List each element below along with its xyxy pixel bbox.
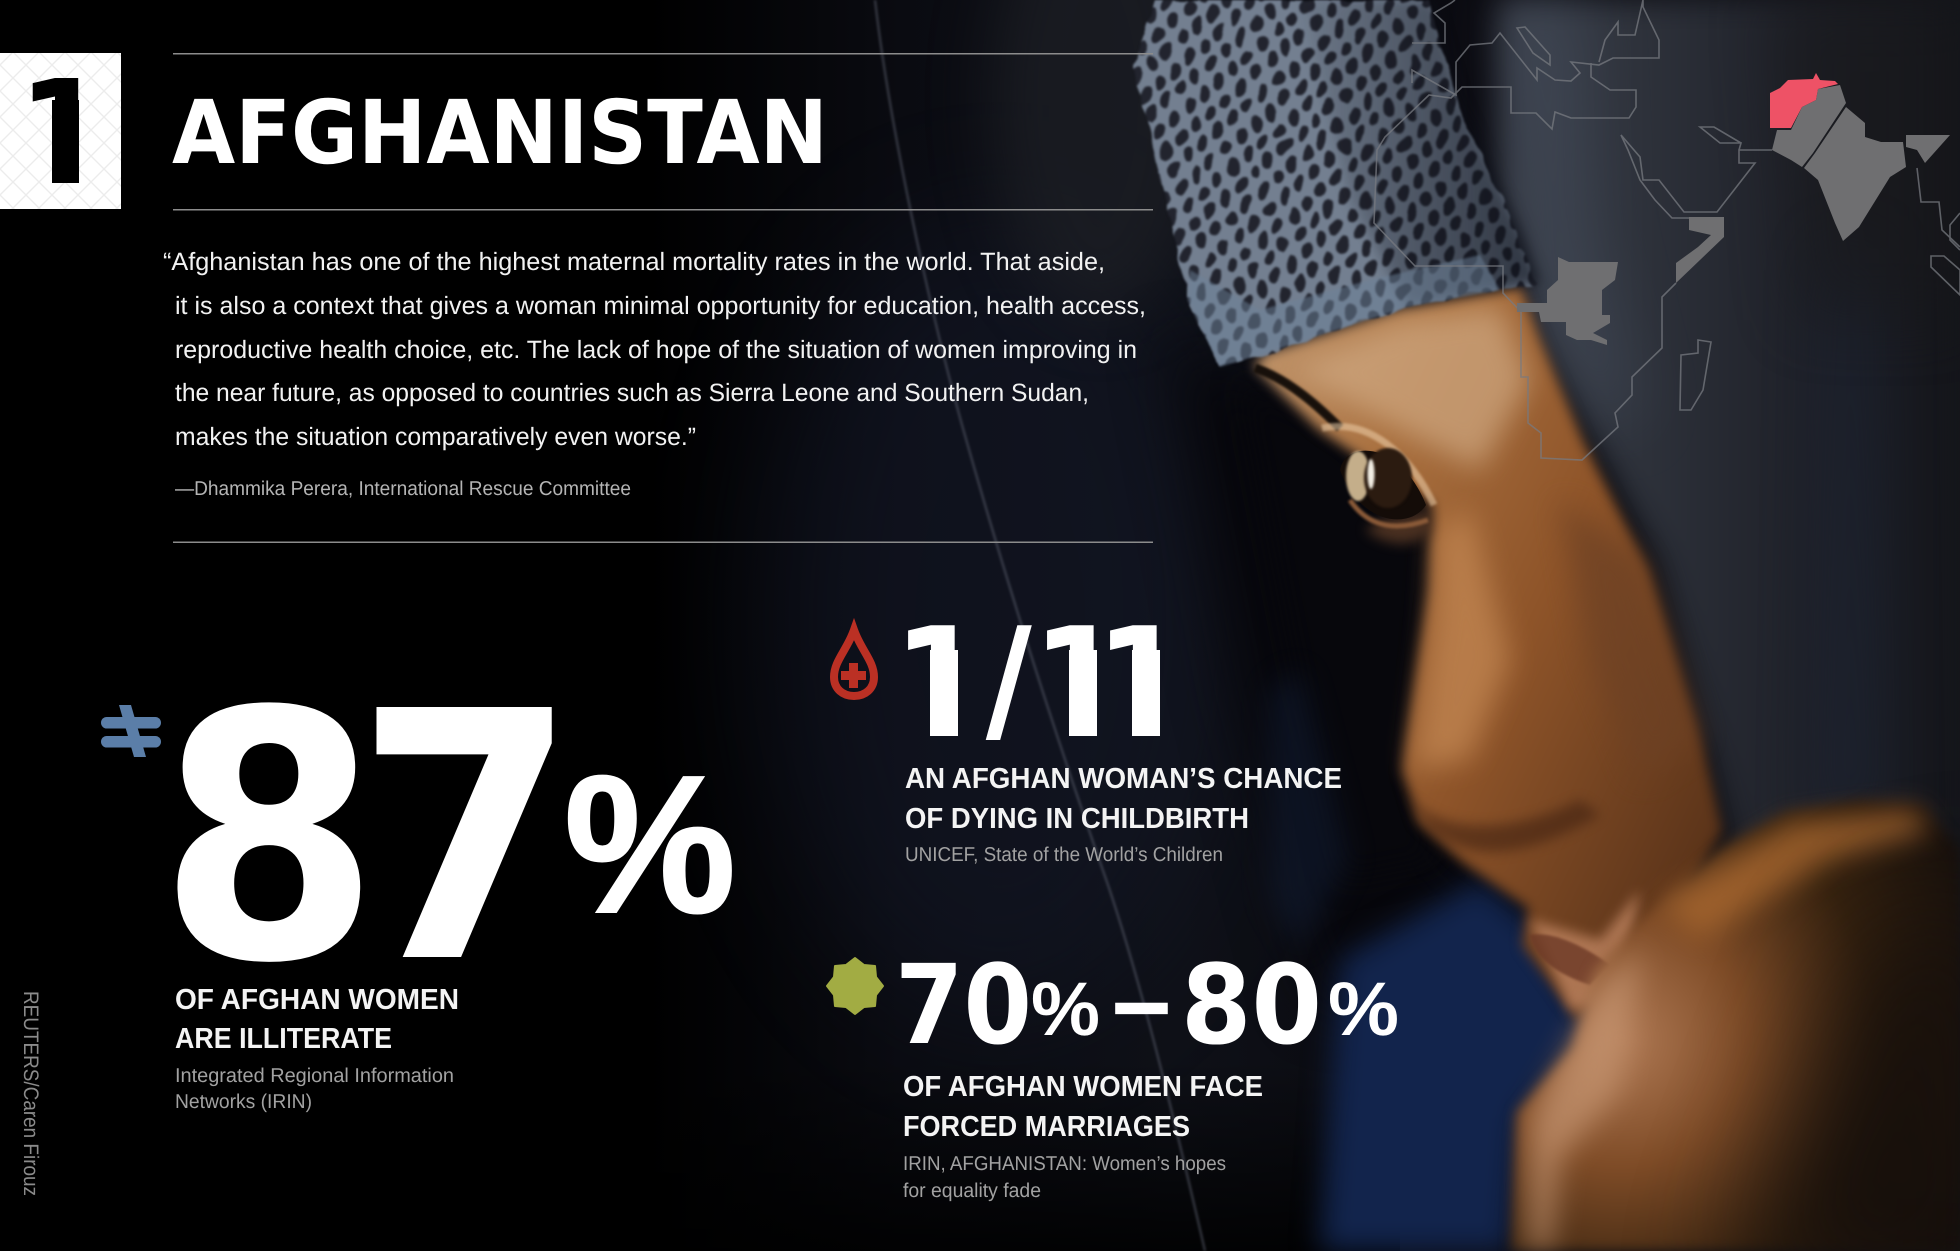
dash: – [1112, 937, 1171, 1064]
source: Networks (IRIN) [175, 1091, 312, 1113]
number: 1/11 [893, 595, 1188, 772]
face shadow [1170, 340, 1590, 1040]
quote: “Afghanistan has one of the highest maternal mortality rates in the world. That aside, [163, 248, 1105, 276]
number 70: 70 [895, 941, 1032, 1069]
source: for equality fade [903, 1180, 1041, 1202]
number 80: 80 [1181, 941, 1322, 1069]
rank number box: 1 [18, 49, 109, 217]
rules [173, 53, 1153, 543]
source: Integrated Regional Information [175, 1065, 454, 1087]
map outlines [1374, 0, 1960, 460]
title: AFGHANISTAN [172, 81, 828, 184]
veil line [875, 0, 1205, 1251]
source [175, 1065, 454, 1113]
number [908, 625, 1160, 740]
blue cloth [1320, 880, 1590, 1251]
quote [163, 248, 1146, 451]
map of Africa and Asia [1374, 0, 1960, 460]
label [903, 1071, 1263, 1143]
big number 87: 87 [158, 639, 577, 1038]
label: AN AFGHAN WOMAN’S CHANCE [905, 763, 1342, 795]
label: FORCED MARRIAGES [903, 1111, 1190, 1143]
stat: 87% illiterate [101, 639, 736, 1113]
label: OF AFGHAN WOMEN FACE [903, 1071, 1263, 1103]
icon: green star [827, 958, 883, 1014]
source [903, 1153, 1226, 1202]
icon: blood drop with cross [834, 630, 874, 696]
Afghanistan highlighted in red [1770, 73, 1838, 128]
icon: not-equal sign [101, 705, 161, 757]
quote: reproductive health choice, etc. The lack of hope of the situation of women improving in [175, 336, 1137, 364]
hand [1511, 800, 1960, 1251]
eye [1255, 368, 1434, 544]
percent sign: % [564, 735, 736, 954]
knit cap [1133, 0, 1540, 367]
label [175, 984, 459, 1055]
face [1254, 285, 1722, 1020]
label [905, 763, 1342, 835]
quote attribution: —Dhammika Perera, International Rescue Committee [175, 478, 631, 500]
label: ARE ILLITERATE [175, 1023, 392, 1055]
quote: the near future, as opposed to countries such as Sierra Leone and Southern Sudan, [175, 379, 1089, 407]
label: OF DYING IN CHILDBIRTH [905, 803, 1249, 835]
percent: % [1328, 967, 1399, 1052]
stat: 1/11 childbirth [834, 595, 1342, 866]
percent: % [1031, 967, 1100, 1052]
quote: it is also a context that gives a woman minimal opportunity for education, health access, [175, 292, 1146, 320]
source: IRIN, AFGHANISTAN: Women’s hopes [903, 1153, 1226, 1175]
label: OF AFGHAN WOMEN [175, 984, 459, 1016]
highlighted countries in grey [1517, 85, 1950, 345]
quote: makes the situation comparatively even worse.” [175, 423, 696, 451]
stat: 70-80% forced marriages [827, 937, 1399, 1202]
photo credit: REUTERS/Caren Firouz [19, 991, 42, 1196]
source: UNICEF, State of the World’s Children [905, 844, 1223, 866]
